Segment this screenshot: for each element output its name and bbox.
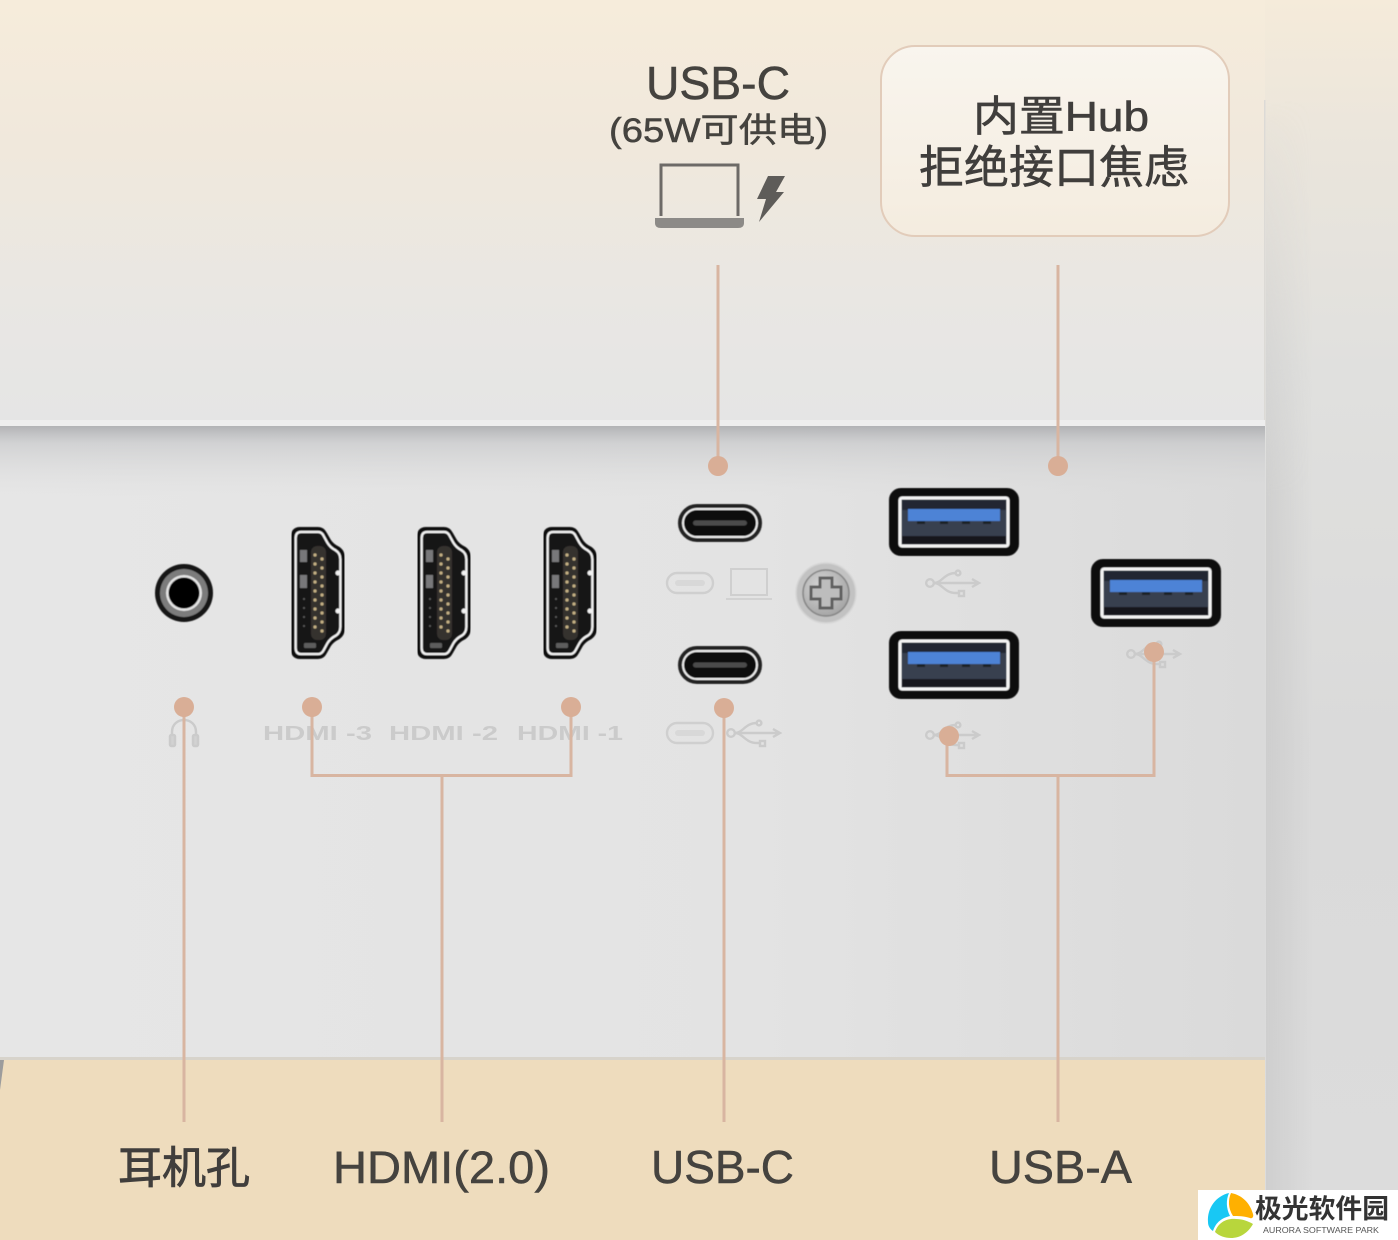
icon: USB-C with laptop symbol	[667, 569, 772, 600]
icon: USB symbol right	[1127, 642, 1180, 667]
port: HDMI-2	[420, 530, 468, 656]
label: USB-C: USB-C	[651, 1141, 794, 1193]
port: headphone jack	[155, 564, 213, 622]
label: HDMI-2: HDMI -2	[389, 723, 498, 745]
callout: built-in hub: 内置Hub	[973, 93, 1149, 140]
label: HDMI-3: HDMI -3	[263, 723, 372, 745]
connector: Hub	[1048, 265, 1068, 476]
icon: USB symbol upper	[926, 571, 979, 596]
watermark: Aurora Software Park: 极光软件园	[1255, 1194, 1389, 1224]
panel: bottom beige band	[0, 1057, 1265, 1240]
label: HDMI 2.0: HDMI(2.0)	[333, 1142, 550, 1193]
callout: built-in hub	[881, 46, 1229, 236]
connector: USB-A	[939, 642, 1164, 1122]
port: HDMI-3	[294, 530, 342, 656]
port: USB-A upper	[892, 491, 1016, 553]
callout: built-in hub: 拒绝接口焦虑	[919, 142, 1189, 193]
connector: bottom USB-C	[714, 698, 734, 1122]
panel: recessed port bay	[0, 420, 1265, 1060]
page background	[1265, 0, 1398, 1190]
panel: upper monitor back	[0, 0, 1266, 425]
icon: mounting screw	[796, 563, 856, 623]
heading: USB-C 65W	[609, 57, 828, 150]
icon: laptop	[655, 165, 744, 228]
watermark: Aurora Software Park	[1198, 1190, 1398, 1240]
icon: watermark logo	[1208, 1193, 1253, 1238]
label: headphone jack: 耳机孔	[118, 1144, 250, 1193]
icon: USB-C with USB symbol	[667, 721, 780, 746]
label: USB-A: USB-A	[989, 1141, 1132, 1193]
label: HDMI-1: HDMI -1	[517, 723, 623, 745]
watermark: Aurora Software Park: AURORA SOFTWARE PARK	[1263, 1226, 1380, 1235]
heading: USB-C 65W: USB-C	[646, 57, 790, 109]
heading: USB-C 65W: (65W可供电)	[609, 112, 828, 150]
connector: HDMI	[302, 697, 581, 1122]
port: USB-C lower	[680, 648, 760, 682]
port: USB-A lower	[892, 634, 1016, 696]
icon: USB symbol lower	[926, 723, 979, 748]
port: HDMI-1	[546, 530, 594, 656]
icon: headphone symbol	[170, 720, 198, 746]
connector: top USB-C	[708, 265, 728, 476]
port: USB-C upper	[680, 506, 760, 540]
icon: lightning bolt	[757, 176, 785, 222]
port: USB-A right	[1094, 562, 1218, 624]
connector: headphone	[174, 697, 194, 1122]
